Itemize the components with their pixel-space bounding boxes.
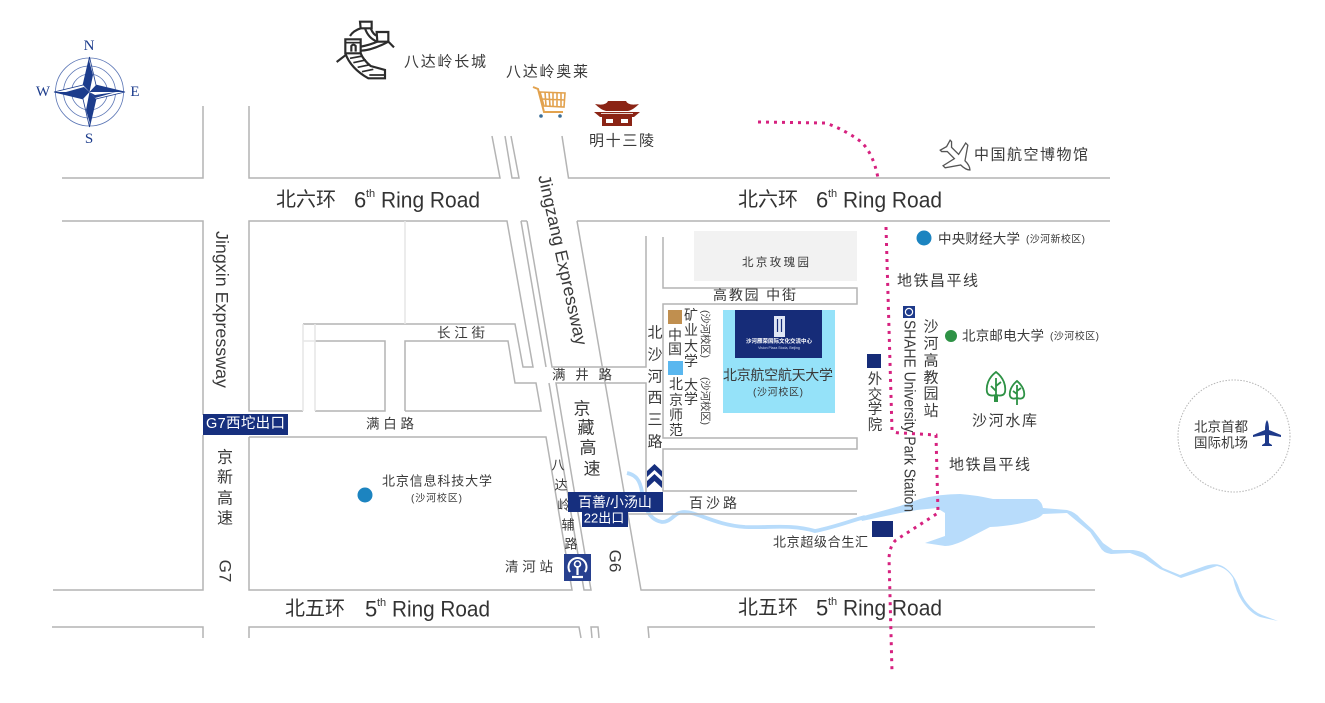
marker: Beijing Information Science and Technology University: 北京信息科技大学 [382, 474, 492, 488]
label: Shahe University Park Station: SHAHE University Park Station [900, 320, 918, 512]
panel: venue logo: 沙河雁荣国际文化交流中心 [746, 337, 812, 345]
marker: Central University of Finance: 中央财经大学 [938, 232, 1020, 246]
compass rose: E [130, 84, 140, 100]
marker: Foreign Affairs University: 外交学院 [868, 371, 883, 434]
label: Ming tombs: 明十三陵 [589, 132, 654, 150]
compass rose [36, 38, 140, 147]
sign: G7 Xituo exit: G7西坨出口 [206, 415, 285, 432]
marker: Central University of Finance [916, 230, 1085, 246]
icon: trees [987, 372, 1024, 405]
label: north 5th ring road right [738, 596, 942, 620]
label: north 5th ring road right: 5 [816, 596, 828, 620]
marker: Beijing Superior Hopson Mall: 北京超级合生汇 [773, 534, 868, 550]
label: north 5th ring road right: 北五环 [738, 596, 798, 619]
label: north 6th ring road left: 6 [354, 188, 366, 212]
label: north 6th ring road right [738, 188, 942, 212]
panel: venue logo [735, 310, 822, 358]
panel: Beijing rose garden [694, 231, 857, 281]
label: Manbai road: 满白路 [366, 416, 414, 432]
icon: direction chevrons [647, 462, 662, 490]
label: north 5th ring road left: Ring Road [392, 596, 490, 622]
label: Jingzang Expressway: Jingzang Expressway [534, 173, 591, 347]
label: north 6th ring road right: 6 [816, 188, 828, 212]
panel: Beihang University [723, 310, 835, 413]
metro station icon [903, 306, 915, 318]
label: metro Changping line lower: 地铁昌平线 [949, 456, 1030, 474]
label: Jingzang highway: 京藏高速 [574, 400, 600, 478]
label: north 6th ring road right: Ring Road [843, 188, 942, 212]
label: Badaling Great Wall: 八达岭长城 [404, 54, 486, 70]
icon: shopping cart [533, 87, 565, 118]
label: north 5th ring road left: 北五环 [285, 597, 345, 620]
compass rose: W [36, 84, 51, 100]
panel: Beihang University: 北京航空航天大学 [723, 367, 833, 383]
label: Shahe Gaojiaoyuan station: 沙河高教园站 [923, 318, 939, 420]
icon: great wall [337, 22, 394, 78]
marker: Beijing Normal University: (沙河校区) [699, 377, 712, 425]
label: Jingxin highway: 京新高速 [217, 448, 233, 528]
marker: Beijing Normal University [668, 361, 712, 438]
label: north 5th ring road right: th [828, 596, 837, 608]
label: Baisha road: 百沙路 [689, 495, 737, 511]
marker: Beijing Normal University: 北京师范 [669, 376, 683, 438]
marker: BUPT: 北京邮电大学 [962, 328, 1044, 344]
panel: Beihang University: (沙河校区) [753, 386, 803, 398]
marker: Beijing Normal University: 大学 [684, 377, 698, 407]
label: Badaling Outlets: 八达岭奥莱 [506, 64, 588, 80]
icon: Ming tombs temple [594, 101, 640, 126]
river and reservoir [627, 473, 1278, 621]
metro line: Changping [758, 122, 938, 672]
marker: Beijing Information Science and Technology University [358, 474, 492, 504]
panel: Beijing rose garden: 北京玫瑰园 [742, 255, 809, 269]
label: Jingxin Expressway: Jingxin Expressway [212, 231, 232, 388]
compass rose: S [85, 131, 93, 147]
airport callout [1178, 380, 1290, 492]
label: Qinghe station: 清河站 [505, 560, 553, 574]
road network [52, 106, 1110, 638]
label: Badaling auxiliary road: 八达岭辅路 [551, 458, 578, 552]
label: north 6th ring road right: 北六环 [738, 188, 798, 211]
marker: China University of Mining: 矿业大学 [684, 307, 698, 369]
label: Changjiang street: 长江街 [437, 326, 485, 340]
label: north 6th ring road left [276, 188, 480, 212]
marker: Beijing Information Science and Technology University: (沙河校区) [411, 492, 462, 504]
label: north 6th ring road left: 北六环 [276, 188, 336, 211]
label: north 5th ring road right: Ring Road [843, 596, 942, 620]
label: north 5th ring road left: 5 [365, 596, 377, 622]
label: G6: G6 [606, 550, 624, 572]
compass rose: N [84, 38, 95, 54]
icon: railway station [564, 554, 591, 581]
label: north 6th ring road left: th [366, 188, 375, 200]
marker: Beijing Superior Hopson Mall [773, 521, 893, 550]
label: Shahe reservoir: 沙河水库 [972, 412, 1037, 430]
marker: China University of Mining [668, 307, 712, 369]
label: G7: G7 [216, 560, 234, 582]
label: north 5th ring road left [285, 596, 490, 622]
airport callout: 国际机场 [1194, 436, 1248, 450]
label: Beishahe west 3rd road: 北沙河西三路 [647, 324, 663, 450]
sign: Baishan Xiaotangshan exit 22: 22出口 [584, 510, 624, 526]
label: Gaojiaoyuan middle street: 高教园 中街 [713, 287, 796, 303]
marker: BUPT: (沙河校区) [1050, 330, 1099, 342]
marker: Central University of Finance: (沙河新校区) [1026, 232, 1085, 246]
marker: China University of Mining: (沙河校区) [699, 310, 712, 358]
label: metro Changping line upper: 地铁昌平线 [897, 272, 978, 290]
label: north 6th ring road left: Ring Road [381, 188, 480, 212]
label: aviation museum: 中国航空博物馆 [974, 146, 1088, 164]
sign: Baishan Xiaotangshan exit 22 [568, 492, 663, 527]
label: north 6th ring road right: th [828, 188, 837, 200]
marker: China University of Mining: 中国 [668, 327, 682, 357]
label: north 5th ring road left: th [377, 597, 386, 609]
panel: venue logo: Vision Plaza Stoda, Beijing [758, 346, 800, 350]
marker: BUPT [945, 328, 1099, 344]
icon: aviation museum plane [934, 134, 981, 181]
sign: Baishan Xiaotangshan exit 22: 百善/小汤山 [578, 494, 652, 510]
airport callout: 北京首都 [1194, 420, 1248, 434]
label: Manjing road: 满井路 [552, 368, 612, 382]
